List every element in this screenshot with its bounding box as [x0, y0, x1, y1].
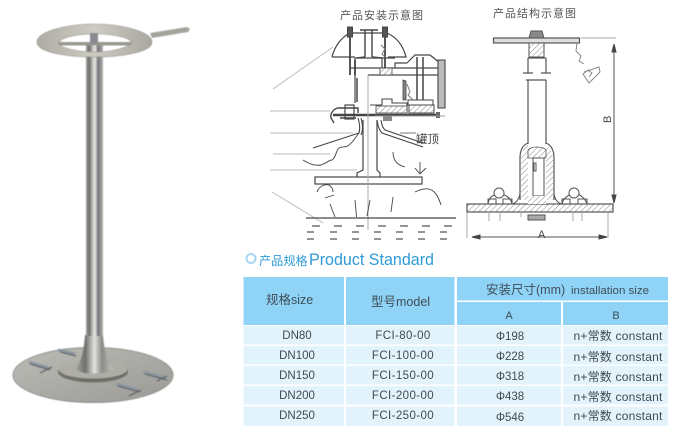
table data: FCI-150-00	[372, 370, 434, 382]
flared hub	[58, 362, 128, 382]
structure diagram	[467, 6, 616, 241]
table data: DN150	[279, 370, 315, 382]
table header labels: 型号model	[371, 295, 430, 309]
specification table	[244, 277, 668, 426]
table data: FCI-200-00	[372, 390, 434, 402]
breakage strokes	[303, 133, 359, 165]
installation diagram title: 产品安装示意图	[340, 8, 424, 22]
pallet assembly	[395, 55, 440, 68]
top plate	[494, 38, 580, 43]
table data: Φ198	[496, 331, 524, 343]
socket housing	[520, 143, 554, 200]
table header labels: 规格size	[266, 292, 313, 307]
vertical pole	[86, 44, 103, 336]
seat	[370, 99, 407, 113]
structure diagram: A	[538, 229, 546, 241]
structure diagram: B	[602, 116, 614, 123]
table data: Φ546	[496, 412, 524, 424]
table body rows	[244, 326, 668, 426]
nozzle and tank roof	[313, 118, 423, 148]
installation diagram: 罐顶	[416, 133, 439, 146]
table data: n+常数 constant	[574, 328, 663, 343]
table data: n+常数 constant	[574, 369, 663, 384]
table data: Φ318	[496, 371, 524, 383]
table header cells	[244, 277, 668, 325]
top ring	[150, 27, 190, 38]
table data: DN250	[279, 410, 315, 422]
table data: FCI-250-00	[372, 410, 434, 422]
table header labels: B	[612, 310, 620, 322]
table data: FCI-100-00	[372, 350, 434, 362]
icon: ring bullet	[246, 254, 256, 263]
table header labels: installation size	[571, 285, 649, 297]
leader lines	[270, 47, 357, 223]
product standard heading	[246, 250, 434, 269]
product photo: stainless float support stand	[13, 24, 190, 402]
base plate	[467, 204, 613, 212]
table data: FCI-80-00	[375, 330, 431, 342]
table data: DN80	[282, 330, 312, 342]
threaded socket	[529, 43, 544, 57]
table data: Φ438	[496, 391, 524, 403]
base disc	[13, 348, 173, 402]
shaft	[523, 58, 551, 144]
valve cap	[332, 33, 406, 57]
table header labels	[266, 282, 649, 322]
ring cross bar	[59, 42, 131, 46]
table header labels: 安装尺寸(mm)	[486, 282, 565, 297]
stand tube	[357, 120, 380, 177]
table data: DN100	[279, 350, 315, 362]
table header labels: A	[505, 310, 513, 322]
table data: DN200	[279, 390, 315, 402]
table data	[279, 328, 663, 424]
dimension A	[467, 212, 608, 238]
dimension B	[581, 37, 616, 39]
broken tie-off zigzag	[576, 43, 600, 83]
base clips	[29, 350, 167, 396]
table data: n+常数 constant	[574, 389, 663, 404]
table data: n+常数 constant	[574, 408, 663, 423]
table data: n+常数 constant	[574, 349, 663, 364]
structure diagram title: 产品结构示意图	[493, 6, 577, 20]
base feet	[488, 193, 587, 204]
product standard heading: Product Standard	[309, 250, 434, 269]
product standard heading: 产品规格	[259, 253, 308, 268]
valve body	[355, 58, 395, 103]
flange	[333, 114, 438, 116]
liquid surface	[306, 217, 456, 219]
table data: Φ228	[496, 351, 524, 363]
installation diagram	[270, 8, 456, 239]
